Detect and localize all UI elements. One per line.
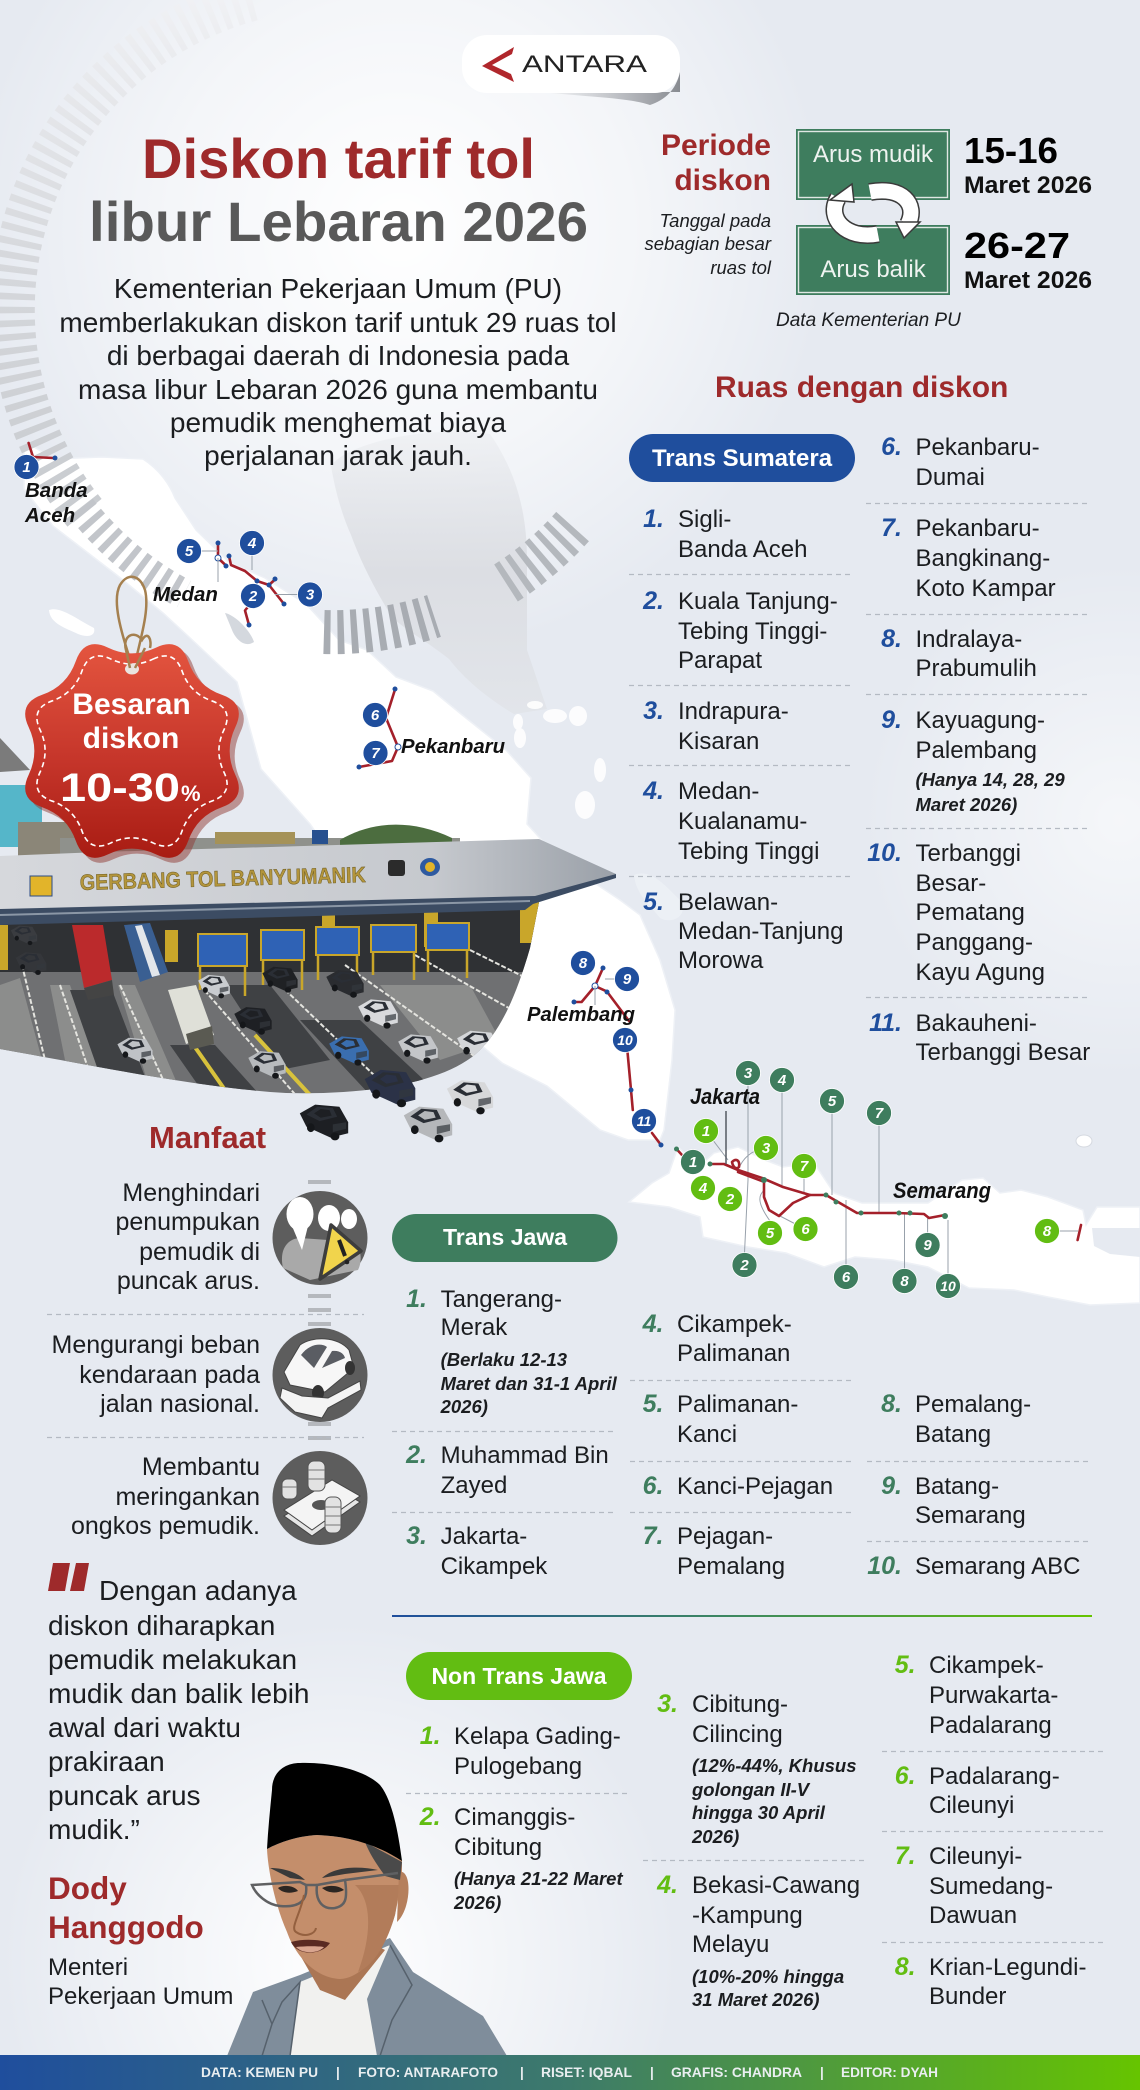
footer bar: RISET: IQBAL: [541, 2065, 632, 2080]
quote text: Dengan adanya: [99, 1575, 297, 1606]
footer bar: |: [820, 2065, 824, 2080]
item 9: Palembang: [916, 737, 1037, 764]
item 3: golongan II-V: [691, 1779, 811, 1800]
item 1: [420, 1722, 621, 1780]
map: sumatra markers: 10: [617, 1032, 633, 1048]
item 3: (12%-44%, Khusus: [692, 1755, 856, 1776]
item 4: 4.: [656, 1871, 678, 1899]
item 7: Pekanbaru-: [916, 515, 1040, 542]
map: trans jawa markers: [680, 1060, 960, 1298]
sign: arus balik: Arus balik: [820, 256, 927, 283]
icon: crowd warning: [272, 1191, 368, 1285]
item 10: Panggang-: [916, 929, 1033, 956]
item 7: 7.: [881, 514, 902, 542]
item 10: 10.: [867, 839, 902, 867]
periode diskon heading: Periode: [661, 129, 771, 162]
icon: coins and cash: [272, 1451, 368, 1545]
item 3: 3.: [643, 697, 664, 725]
map: trans jawa markers: 1: [689, 1154, 697, 1171]
quote text: pemudik melakukan: [48, 1644, 297, 1675]
intro paragraph: pemudik menghemat biaya: [170, 407, 507, 438]
footer bar: [0, 2055, 1140, 2090]
nose: [294, 1895, 316, 1935]
item 10: Besar-: [916, 870, 986, 897]
footer bar: FOTO: ANTARAFOTO: [358, 2065, 498, 2080]
pill: trans sumatera: [629, 434, 855, 482]
item 1: [643, 505, 807, 563]
jacket: [227, 1938, 507, 2056]
item 9: (Hanya 14, 28, 29: [916, 769, 1065, 790]
item 1: (Berlaku 12-13: [441, 1349, 568, 1370]
periode note: ruas tol: [710, 257, 772, 278]
item 2: [642, 587, 838, 674]
ear: [397, 1872, 409, 1922]
blue truck: [124, 923, 168, 982]
item 1: Tangerang-: [441, 1286, 562, 1313]
map: riau islands: [513, 701, 606, 819]
rope: [117, 577, 151, 668]
pill: trans jawa: [392, 1214, 618, 1262]
speaker name: Dody: [48, 1870, 127, 1906]
quote mark: [48, 1563, 89, 1591]
item 2: Cimanggis-: [454, 1804, 575, 1831]
item 10: Semarang ABC: [915, 1553, 1080, 1580]
item 1: Pulogebang: [454, 1753, 582, 1780]
cars beyond photo edge: [300, 1070, 493, 1142]
logo: ANTARA: [522, 51, 647, 78]
map: trans jawa markers: 4: [777, 1072, 787, 1089]
benefit text 3: meringankan: [115, 1483, 260, 1511]
dates: arus mudik: [964, 130, 1092, 199]
item 6: [895, 1762, 1060, 1819]
panel: trans jawa: [392, 1214, 1090, 1580]
item 4: Kualanamu-: [678, 808, 807, 835]
item 4: Cikampek-: [677, 1311, 792, 1338]
footer bar: |: [520, 2065, 524, 2080]
item 8: [881, 625, 1037, 682]
map: non trans jawa markers: 1: [702, 1123, 710, 1140]
item 8: [881, 1390, 1031, 1448]
eyes: [278, 1886, 344, 1893]
item 2: 2.: [405, 1441, 427, 1469]
item 11: Terbanggi Besar: [916, 1039, 1090, 1066]
sign: arus mudik: Arus mudik: [813, 141, 934, 168]
footer bar: GRAFIS: CHANDRA: [671, 2065, 802, 2080]
footer bar: |: [650, 2065, 654, 2080]
pill: non trans jawa: [406, 1652, 632, 1700]
item 6: Pekanbaru-: [916, 434, 1040, 461]
item 1: [406, 1285, 618, 1417]
gate logos: [30, 858, 440, 896]
item 7: [895, 1842, 1053, 1929]
city label: semarang: Semarang: [893, 1178, 992, 1203]
map: trans jawa markers: 7: [875, 1105, 884, 1122]
item 4: [642, 1310, 792, 1367]
city label: medan: Medan: [153, 583, 218, 606]
footer bar: |: [336, 2065, 340, 2080]
speaker title: Pekerjaan Umum: [48, 1983, 233, 2010]
gate name: GERBANG TOL BANYUMANIK: [79, 862, 366, 895]
icon: antara mark: [482, 47, 514, 82]
item 6: Padalarang-: [929, 1763, 1060, 1790]
item 8: Indralaya-: [916, 626, 1022, 653]
item 7: Cileunyi-: [929, 1843, 1022, 1870]
quote text: prakiraan: [48, 1746, 165, 1777]
benefit text 1: Menghindari: [122, 1179, 260, 1207]
item 4: 31 Maret 2026): [692, 1989, 820, 2010]
panel: trans sumatera: [629, 433, 1091, 1066]
item 2: Kuala Tanjung-: [678, 588, 838, 615]
quote text: mudik.”: [48, 1814, 140, 1845]
title: [89, 127, 588, 253]
logo: [462, 35, 680, 105]
red truck: [72, 925, 114, 1000]
item 2: Tebing Tinggi-: [678, 618, 827, 645]
map: non trans jawa markers: [690, 1118, 1060, 1246]
discount tag: diskon: [83, 722, 179, 755]
item 9: Maret 2026): [916, 794, 1017, 815]
item 5: Belawan-: [678, 889, 778, 916]
footer bar: EDITOR: DYAH: [841, 2065, 938, 2080]
item 9: Semarang: [915, 1502, 1026, 1529]
item 3: Jakarta-: [441, 1523, 527, 1550]
warning triangle: [320, 1225, 361, 1279]
shirt: [290, 1945, 390, 2056]
photo: toll gate: [0, 738, 616, 1142]
item 4: 4.: [642, 777, 664, 805]
gate pillars: [0, 897, 540, 970]
item 11: Bakauheni-: [916, 1010, 1037, 1037]
city label: palembang: Palembang: [527, 1003, 635, 1026]
item 8: 8.: [881, 625, 902, 653]
intro paragraph: di berbagai daerah di Indonesia pada: [107, 340, 570, 371]
item 4: Medan-: [678, 778, 759, 805]
map: sumatra markers: 2: [248, 588, 258, 605]
item 7: 7.: [643, 1522, 664, 1550]
city label: jakarta: Jakarta: [690, 1084, 760, 1109]
item 6: Dumai: [916, 464, 985, 491]
item 4: 4.: [642, 1310, 664, 1338]
discount tag: [25, 577, 244, 863]
neck: [300, 1945, 385, 2000]
item 5: Purwakarta-: [929, 1682, 1058, 1709]
footer bar: DATA: KEMEN PU: [201, 2065, 318, 2080]
decorative arc ticks: [13, 0, 574, 632]
item 2: Parapat: [678, 647, 762, 674]
item 7: Bangkinang-: [916, 545, 1050, 572]
item 7: [881, 514, 1056, 602]
map: trans jawa markers: 3: [744, 1065, 753, 1082]
benefit text 2: Mengurangi beban: [52, 1331, 260, 1359]
map: non trans jawa markers: 3: [762, 1140, 771, 1157]
speaker name: [48, 1870, 204, 1945]
map: sumatra markers: 8: [579, 955, 588, 972]
item 3: hingga 30 April: [692, 1802, 826, 1823]
quote text: puncak arus: [48, 1780, 201, 1811]
item 5: [643, 1390, 798, 1448]
item 9: [881, 1472, 1026, 1529]
section separator: [392, 1615, 1092, 1617]
item 8: Krian-Legundi-: [929, 1954, 1086, 1981]
peci: [267, 1763, 402, 1861]
map: non trans jawa markers: 5: [766, 1225, 775, 1242]
item 1: Sigli-: [678, 506, 731, 533]
item 2: Zayed: [441, 1472, 507, 1499]
item 6: 6.: [895, 1762, 916, 1790]
item 3: Kisaran: [678, 728, 759, 755]
discount tag: 10-30: [60, 766, 180, 810]
item 8: Pemalang-: [915, 1391, 1031, 1418]
map: nias island: [49, 609, 94, 636]
item 3: Cikampek: [441, 1553, 548, 1580]
item 1: 1.: [420, 1722, 441, 1750]
item 8: Prabumulih: [916, 655, 1037, 682]
map: non trans jawa markers: 4: [698, 1180, 708, 1197]
item 8: [895, 1953, 1086, 2010]
face: [267, 1835, 402, 1979]
item 3: 2026): [691, 1826, 739, 1847]
item 4: -Kampung: [692, 1902, 803, 1929]
map: lake toba: [225, 613, 254, 644]
benefit text 3: ongkos pemudik.: [71, 1512, 260, 1540]
item 1: Kelapa Gading-: [454, 1723, 621, 1750]
item 10: Kayu Agung: [916, 959, 1045, 986]
item 8: 8.: [881, 1390, 902, 1418]
map: sumatra markers: 6: [371, 707, 380, 724]
item 3: [657, 1690, 856, 1847]
hair: [365, 1842, 402, 1880]
benefit text 1: pemudik di: [139, 1238, 260, 1266]
item 5: Kanci: [677, 1421, 737, 1448]
map: trans jawa markers: 8: [900, 1273, 909, 1290]
map: madura strait: [1092, 1228, 1140, 1257]
item 1: Banda Aceh: [678, 536, 807, 563]
discount tag: %: [181, 781, 201, 806]
item 3: 3.: [657, 1690, 678, 1718]
map: sumatra toll roads: [29, 443, 664, 1148]
map: trans jawa markers: 10: [940, 1278, 956, 1294]
portrait: minister: [227, 1763, 507, 2056]
item 4: (10%-20% hingga: [692, 1966, 844, 1987]
city label: banda aceh: Banda: [25, 479, 88, 502]
item 4: Tebing Tinggi: [678, 838, 819, 865]
map: sumatra markers: 9: [623, 971, 632, 988]
sign: arus mudik: [796, 129, 950, 200]
map: trans jawa markers: 5: [828, 1093, 837, 1110]
canopy: [0, 839, 616, 925]
map: non trans jawa markers: 8: [1043, 1223, 1052, 1240]
item 6: 6.: [881, 433, 902, 461]
periode diskon heading: [661, 129, 771, 197]
item 5: Cikampek-: [929, 1652, 1044, 1679]
intro paragraph: masa libur Lebaran 2026 guna membantu: [78, 374, 598, 405]
data source: Data Kementerian PU: [776, 310, 961, 331]
title: libur Lebaran 2026: [89, 190, 588, 253]
eyebrows: [270, 1868, 378, 1880]
item 2: [405, 1441, 609, 1499]
heading: ruas dengan diskon: Ruas dengan diskon: [715, 371, 1008, 404]
dates: arus mudik: Maret 2026: [964, 172, 1092, 199]
dates: arus balik: 26-27: [964, 225, 1070, 266]
icon: car and road: [272, 1328, 368, 1422]
dates: arus mudik: 15-16: [964, 130, 1058, 171]
city label: banda aceh: Aceh: [24, 504, 75, 527]
periode note: sebagian besar: [644, 233, 772, 254]
city label: pekanbaru: Pekanbaru: [401, 735, 505, 758]
item 10: Terbanggi: [916, 840, 1021, 867]
item 7: Koto Kampar: [916, 575, 1056, 602]
item 5: 5.: [643, 888, 664, 916]
item 5: [895, 1651, 1058, 1739]
item 3: Indrapura-: [678, 698, 789, 725]
benefit text 1: puncak arus.: [117, 1267, 260, 1295]
item 2: [419, 1803, 623, 1913]
item 10: 10.: [867, 1552, 902, 1580]
map: trans jawa markers: 9: [923, 1237, 932, 1254]
item 5: Padalarang: [929, 1712, 1052, 1739]
speaker title: Menteri: [48, 1954, 128, 1981]
item 9: 9.: [881, 1472, 902, 1500]
item 9: 9.: [881, 706, 902, 734]
periode diskon heading: diskon: [674, 164, 771, 197]
item 4: Bekasi-Cawang: [692, 1872, 860, 1899]
item 5: Morowa: [678, 947, 764, 974]
item 5: 5.: [895, 1651, 916, 1679]
map: java: [629, 1147, 1140, 1305]
item 8: 8.: [895, 1953, 916, 1981]
intro paragraph: perjalanan jarak jauh.: [204, 440, 472, 471]
panel: benefits: [47, 1179, 368, 1545]
item 3: Cilincing: [692, 1721, 783, 1748]
speaker name: Hanggodo: [48, 1909, 204, 1945]
map: bangka island: [634, 873, 683, 920]
heading: manfaat: Manfaat: [149, 1120, 266, 1155]
benefit text 2: jalan nasional.: [99, 1390, 260, 1418]
map: trans jawa markers: 6: [842, 1269, 851, 1286]
map: sumatra markers: 1: [22, 459, 31, 476]
quote text: diskon diharapkan: [48, 1610, 275, 1641]
item 6: 6.: [643, 1472, 664, 1500]
discount tag: Besaran: [72, 688, 191, 721]
item 10: [867, 839, 1045, 986]
map: non trans jawa markers: 7: [800, 1158, 809, 1175]
item 5: Medan-Tanjung: [678, 918, 843, 945]
item 2: Cibitung: [454, 1834, 542, 1861]
item 2: (Hanya 21-22 Maret: [454, 1868, 623, 1889]
item 5: [643, 888, 843, 974]
map: malay peninsula: [331, 432, 547, 714]
item 9: [881, 706, 1065, 815]
item 2: Muhammad Bin: [441, 1442, 609, 1469]
item 3: [643, 697, 789, 755]
map: sumatra markers: 5: [185, 543, 194, 560]
periode note: Tanggal pada: [660, 210, 771, 231]
title: Diskon tarif tol: [142, 127, 535, 190]
sign: arus balik: [796, 225, 950, 295]
map: sumatra markers: 7: [371, 745, 380, 762]
road and lanes: [0, 902, 539, 1094]
item 7: Dawuan: [929, 1902, 1017, 1929]
intro paragraph: Kementerian Pekerjaan Umum (PU): [114, 273, 562, 304]
item 2: 2.: [642, 587, 664, 615]
quote text: mudik dan balik lebih: [48, 1678, 310, 1709]
panel: non trans jawa: [406, 1651, 1105, 2010]
map: sumatra markers: 3: [306, 586, 315, 604]
item 4: [656, 1871, 860, 2010]
lane signs: [198, 923, 469, 966]
item 7: Sumedang-: [929, 1873, 1053, 1900]
intro paragraph: memberlakukan diskon tarif untuk 29 ruas tol: [59, 307, 617, 338]
item 1: Maret dan 31-1 April: [441, 1373, 618, 1394]
item 4: Melayu: [692, 1931, 769, 1958]
item 9: Kayuagung-: [916, 707, 1045, 734]
quote text: awal dari waktu: [48, 1712, 241, 1743]
dates: arus balik: [964, 225, 1092, 294]
white truck: [168, 985, 214, 1050]
item 2: 2026): [453, 1892, 501, 1913]
map: sumatra markers: 11: [637, 1113, 651, 1129]
benefit text 1: penumpukan: [115, 1208, 260, 1236]
item 7: 7.: [895, 1842, 916, 1870]
item 4: [642, 777, 819, 865]
map: small island north of java: [1076, 1135, 1092, 1147]
mouth: [291, 1940, 330, 1953]
pill: trans sumatera: Trans Sumatera: [652, 445, 833, 472]
pill: trans jawa: Trans Jawa: [443, 1224, 567, 1250]
backdrop behind tag: [0, 738, 460, 868]
map: sumatra markers: [14, 454, 656, 1134]
item 3: Cibitung-: [692, 1691, 788, 1718]
item 1: 1.: [643, 505, 664, 533]
map: sumatra: [24, 443, 675, 1140]
benefit text 2: kendaraan pada: [79, 1361, 260, 1389]
item 3: 3.: [406, 1522, 427, 1550]
item 8: Batang: [915, 1421, 991, 1448]
item 2: 2.: [419, 1803, 441, 1831]
pill: non trans jawa: Non Trans Jawa: [431, 1663, 607, 1689]
map: trans jawa markers: 2: [739, 1257, 749, 1274]
item 1: Merak: [441, 1314, 508, 1341]
item 8: Bunder: [929, 1983, 1006, 2010]
map: sumatra markers: 4: [247, 535, 257, 552]
benefit text 3: Membantu: [142, 1453, 260, 1481]
item 7: Pejagan-: [677, 1523, 773, 1550]
item 6: Kanci-Pejagan: [677, 1473, 833, 1500]
item 3: [406, 1522, 548, 1580]
item 6: Cileunyi: [929, 1792, 1014, 1819]
item 9: Batang-: [915, 1473, 999, 1500]
item 5: Palimanan-: [677, 1391, 798, 1418]
item 7: [643, 1522, 785, 1580]
map: non trans jawa markers: 2: [725, 1191, 735, 1208]
icon: circular arrows: [830, 184, 920, 238]
map: jakarta pointer: [725, 1111, 727, 1164]
item 11: 11.: [869, 1009, 902, 1037]
map: non trans jawa markers: 6: [801, 1221, 810, 1238]
item 11: [869, 1009, 1090, 1066]
map: java toll roads: [674, 1085, 1081, 1274]
item 1: 2026): [440, 1396, 488, 1417]
item 1: 1.: [406, 1285, 427, 1313]
item 6: [881, 433, 1040, 491]
item 10: Pematang: [916, 899, 1025, 926]
dates: arus balik: Maret 2026: [964, 267, 1092, 294]
item 7: Pemalang: [677, 1553, 785, 1580]
item 5: 5.: [643, 1390, 664, 1418]
item 4: Palimanan: [677, 1340, 790, 1367]
glasses: [252, 1873, 398, 1908]
